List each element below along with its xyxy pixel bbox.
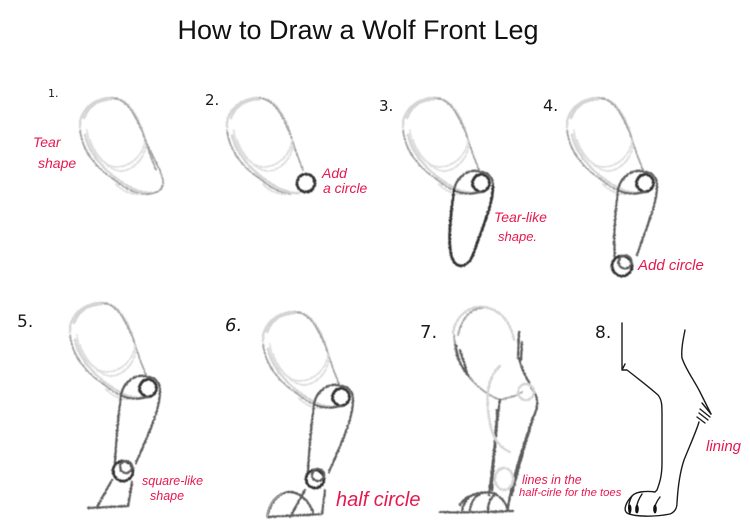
step 1: tear shape [33, 87, 163, 194]
step 3: tear-like shape: 3. [379, 97, 393, 115]
step 6: half circle [225, 312, 420, 517]
step 5: square-like shape: 5. [17, 312, 33, 332]
step 3: tear-like shape [379, 97, 547, 266]
step 2: add a circle: Add [321, 165, 348, 181]
step 8: final lining: lining [706, 438, 742, 455]
step 7: lines in the half-circle for the toes: lines in the [522, 473, 582, 487]
step 8: final lining [595, 323, 742, 516]
title: How to Draw a Wolf Front Leg [178, 15, 538, 45]
step 2: add a circle: 2. [205, 91, 219, 109]
step 6: half circle: 6. [225, 315, 242, 336]
step 6: half circle: half circle [336, 489, 420, 511]
step 1: tear shape: shape [38, 155, 76, 171]
step 5: square-like shape [17, 303, 203, 508]
step 2: add a circle: a circle [323, 180, 368, 196]
step 4: add circle [543, 96, 704, 276]
step 7: lines in the half-circle for the toes [420, 307, 622, 512]
step 5: square-like shape: shape [150, 489, 184, 503]
step 1: tear shape: 1. [48, 87, 58, 100]
step 5: square-like shape: square-like [142, 474, 203, 488]
step 7: lines in the half-circle for the toes: 7. [420, 322, 437, 343]
step 3: tear-like shape: Tear-like [494, 209, 547, 225]
step 4: add circle: 4. [543, 96, 558, 115]
step 2: add a circle [205, 91, 368, 196]
step 8: final lining: 8. [595, 323, 611, 343]
step 4: add circle: Add circle [637, 257, 704, 274]
step 7: lines in the half-circle for the toes: half-cirle for the toes [519, 487, 622, 499]
step 1: tear shape: Tear [33, 134, 62, 150]
step 3: tear-like shape: shape. [498, 229, 537, 244]
